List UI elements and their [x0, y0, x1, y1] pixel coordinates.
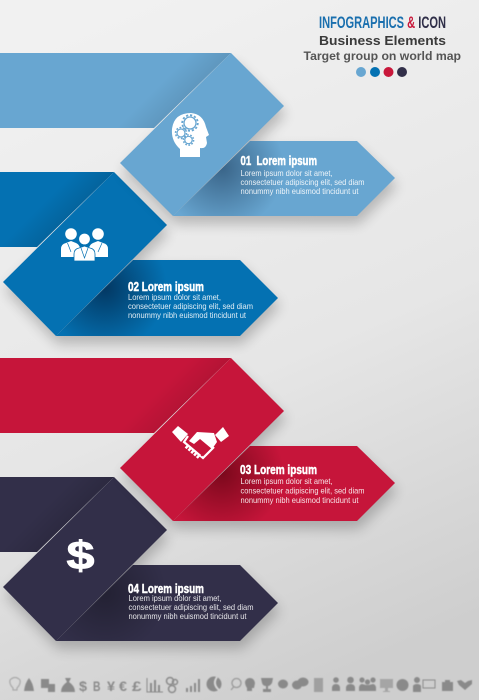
panel 02: blue arrow	[0, 172, 280, 344]
currency symbols: ¥	[107, 678, 115, 694]
ribbon band	[0, 53, 231, 128]
body text 03: nonummy nibh euismod tincidunt ut	[240, 496, 359, 505]
body text 04: Lorem ipsum dolor sit amet,	[128, 594, 222, 603]
heading 04: 04 Lorem ipsum	[128, 581, 204, 596]
lower arrow	[56, 260, 278, 336]
currency symbols: $	[79, 678, 87, 694]
icon: monitor chart	[380, 679, 393, 692]
icon: growth chart	[186, 679, 200, 692]
currency symbols: £	[132, 678, 142, 694]
fold parallelogram	[3, 172, 167, 336]
panel 03: red arrow	[0, 358, 397, 529]
icon: handshake	[172, 426, 229, 458]
heading 02: 02 Lorem ipsum	[128, 279, 204, 294]
icon: team of people	[61, 228, 108, 261]
icon: rocket	[24, 678, 34, 691]
panel 04: navy arrow	[0, 477, 280, 649]
icon: head with gears	[172, 113, 209, 157]
ribbon band	[0, 358, 231, 433]
icon: presenter	[413, 677, 435, 692]
icon: document	[314, 678, 323, 692]
icon: handshake small	[457, 680, 472, 690]
currency symbols: B	[93, 678, 100, 694]
lower arrow	[56, 565, 278, 641]
icon: globe	[206, 676, 222, 692]
currency symbols	[79, 678, 142, 694]
icon: group	[359, 677, 376, 691]
icon: person	[332, 677, 340, 691]
lower arrow	[173, 446, 395, 521]
icon: linked gears	[166, 678, 178, 692]
icon: coins	[41, 679, 55, 692]
icon: trophy	[261, 678, 273, 692]
icon: woman	[346, 677, 355, 691]
body text 02: consectetuer adipiscing elit, sed diam	[128, 302, 253, 311]
icon: dollar sign: $	[66, 534, 94, 578]
body text 01: Lorem ipsum dolor sit amet,	[240, 169, 332, 178]
body text 03: consectetuer adipiscing elit, sed diam	[240, 486, 365, 496]
icon: money bag	[61, 678, 75, 692]
fold parallelogram	[120, 358, 284, 521]
icon: clock	[396, 679, 408, 691]
ribbon band	[0, 477, 114, 552]
body text 02	[128, 293, 253, 320]
body text 04: consectetuer adipiscing elit, sed diam	[128, 603, 254, 612]
body text 01: nonummy nibh euismod tincidunt ut	[240, 187, 359, 196]
subtitle: business elements: Business Elements	[319, 33, 446, 48]
icon: bar chart	[147, 678, 163, 692]
title block	[304, 14, 461, 77]
body text 02: nonummy nibh euismod tincidunt ut	[128, 311, 247, 320]
icon: bulb	[10, 678, 20, 690]
currency symbols: €	[119, 678, 127, 694]
heading 03: 03 Lorem ipsum	[240, 462, 317, 477]
panel 01: light blue arrow	[0, 53, 397, 224]
colour dots	[356, 67, 407, 77]
body text 02: Lorem ipsum dolor sit amet,	[128, 293, 221, 302]
body text 01: consectetuer adipiscing elit, sed diam	[240, 178, 365, 187]
title: infographics and icon: INFOGRAPHICS & ICON	[319, 14, 446, 32]
body text 04	[128, 594, 254, 621]
fold parallelogram	[120, 53, 284, 216]
tagline: Target group on world map	[304, 51, 461, 63]
lower arrow	[173, 141, 395, 216]
body text 04: nonummy nibh euismod tincidunt ut	[128, 612, 247, 621]
icon: magnifier	[231, 678, 241, 690]
body text 03	[240, 477, 365, 505]
body text 03: Lorem ipsum dolor sit amet,	[240, 477, 332, 486]
ribbon band	[0, 172, 114, 247]
icon: briefcase	[442, 680, 453, 691]
body text 01	[240, 169, 365, 196]
icon: chats	[292, 678, 308, 690]
fold parallelogram	[3, 477, 167, 641]
icon: head	[245, 678, 255, 691]
heading 01: 01 Lorem ipsum	[240, 153, 317, 168]
icon: chat	[278, 680, 288, 688]
bottom icon strip	[10, 676, 472, 694]
